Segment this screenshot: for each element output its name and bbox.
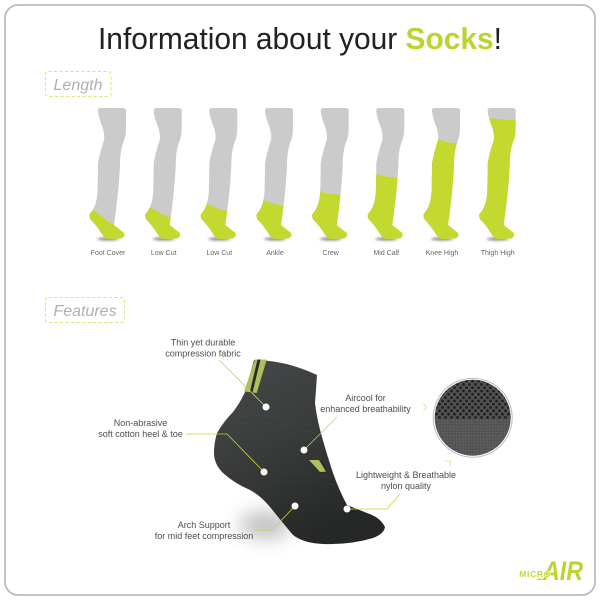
callout dots xyxy=(260,404,350,512)
text: thin yet durable: compression fabric xyxy=(165,348,241,358)
leg: knee high: Knee High xyxy=(426,250,458,257)
callout line: heel xyxy=(186,434,264,472)
text: aircool: enhanced breathability xyxy=(320,404,411,414)
text: non-abrasive: soft cotton heel & toe xyxy=(98,429,183,439)
leg: ankle: Ankle xyxy=(266,250,284,257)
knit bands xyxy=(226,416,335,485)
icon: corner mark xyxy=(444,461,450,466)
fabric close-up xyxy=(432,378,513,458)
icon: chevron xyxy=(424,404,426,411)
leg: knee high xyxy=(423,108,460,256)
leg: low cut: Low Cut xyxy=(151,250,177,257)
text: thin yet durable: Thin yet durable xyxy=(171,338,235,348)
leg: low cut 2 xyxy=(200,108,238,255)
leg: low cut 2: Low Cut xyxy=(206,250,232,257)
leg: mid calf: Mid Calf xyxy=(373,250,399,257)
text: arch support: Arch Support xyxy=(178,520,231,530)
leg: ankle xyxy=(256,108,293,255)
leg: crew: Crew xyxy=(323,250,340,257)
title: Information about your Socks! xyxy=(98,22,502,56)
callout line: fabric xyxy=(219,360,266,407)
callout line: arch xyxy=(255,506,295,530)
callout line: aircool xyxy=(304,417,337,450)
logo: AIR xyxy=(542,556,583,586)
heading: features xyxy=(46,298,124,322)
text: aircool: Aircool for xyxy=(345,393,386,403)
callout line: nylon xyxy=(347,494,400,509)
leg: foot cover xyxy=(89,108,126,255)
heading: length: Length xyxy=(54,77,103,94)
vent stripes xyxy=(309,460,328,472)
text: lightweight: nylon quality xyxy=(381,481,432,491)
logo xyxy=(519,556,583,586)
text: lightweight: Lightweight & Breathable xyxy=(356,470,456,480)
leg: low cut xyxy=(145,108,182,255)
text: arch support: for mid feet compression xyxy=(155,531,253,541)
leg: foot cover: Foot Cover xyxy=(91,250,126,257)
heading: length xyxy=(46,72,111,96)
logo: MICRO xyxy=(519,569,551,579)
cuff stripes xyxy=(244,360,267,393)
leg: thigh high xyxy=(479,108,516,256)
leg: mid calf xyxy=(368,108,404,255)
leg: crew xyxy=(312,108,349,255)
sock xyxy=(214,360,385,544)
heading: features: Features xyxy=(53,303,117,320)
text: non-abrasive: Non-abrasive xyxy=(114,418,167,428)
leg: thigh high: Thigh High xyxy=(481,250,515,257)
